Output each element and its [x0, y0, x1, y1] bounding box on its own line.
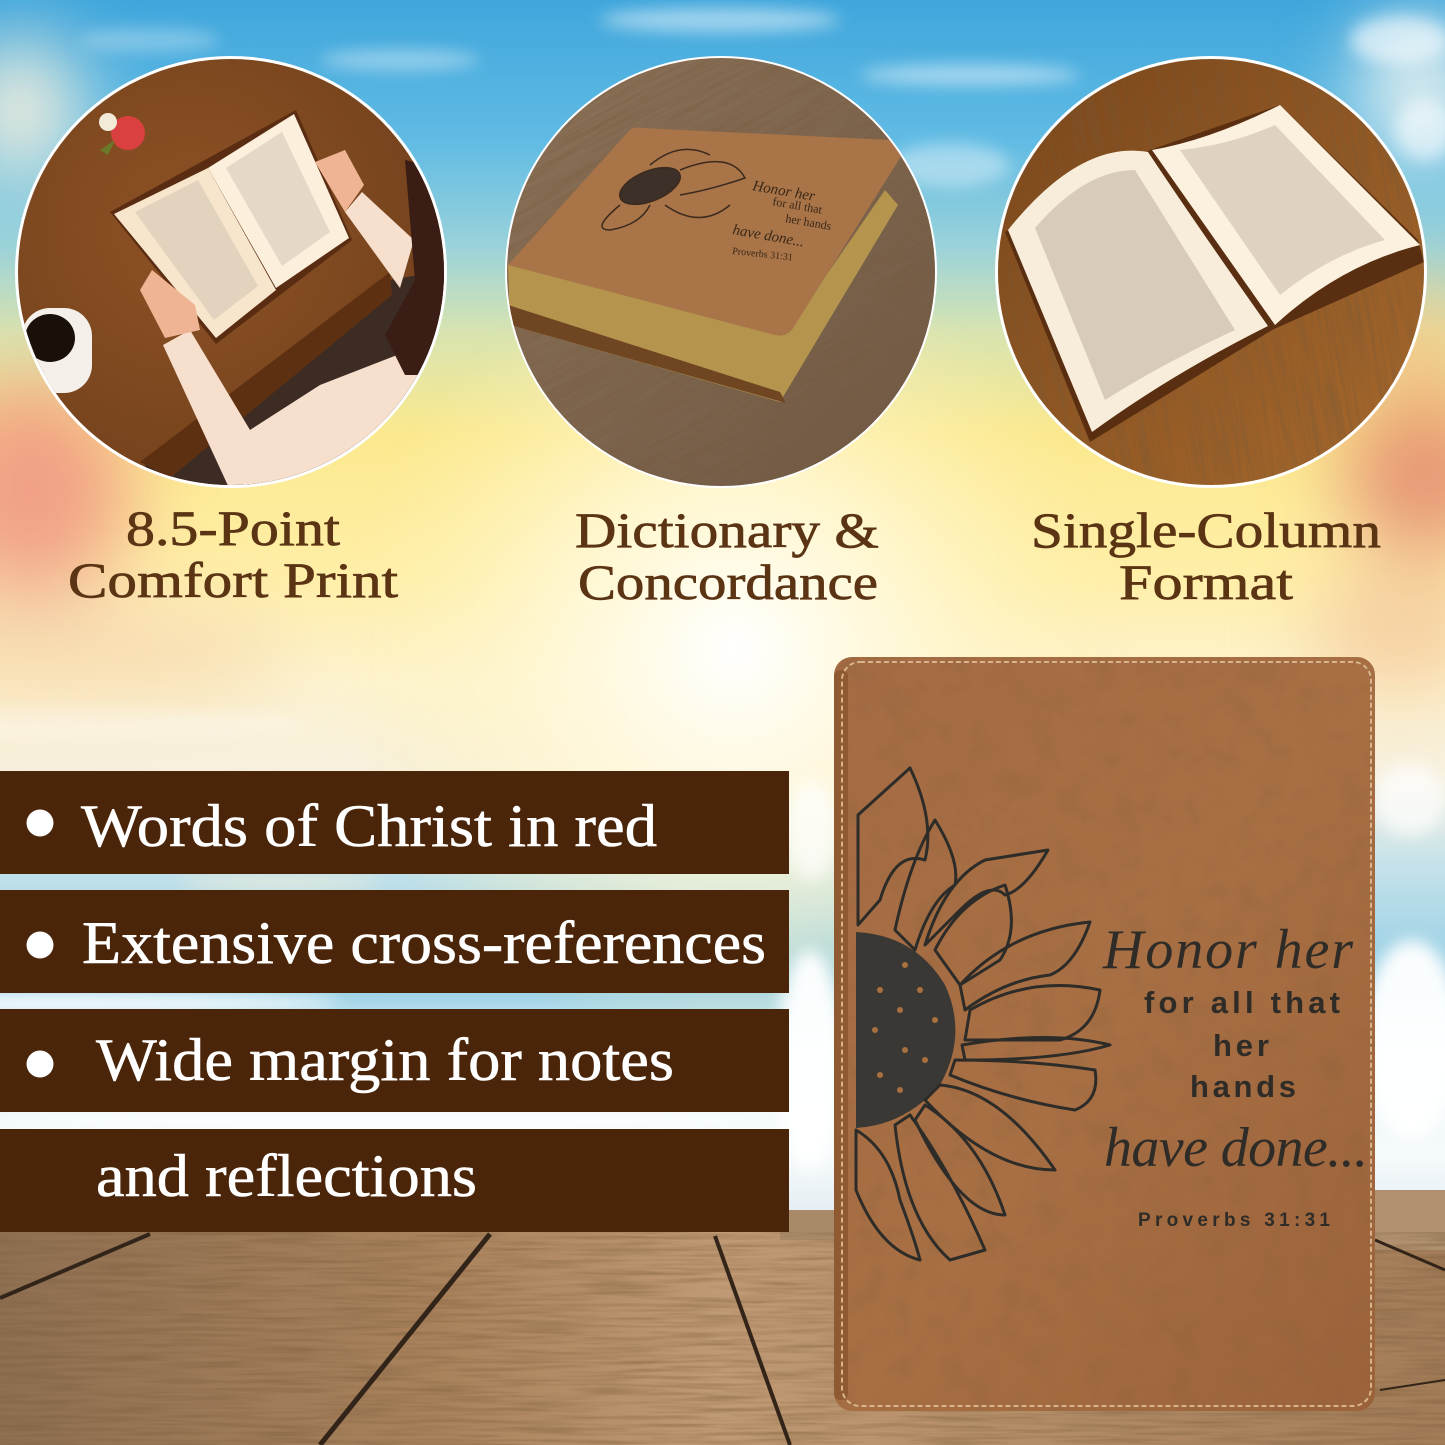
photo circle: open Bible on wood	[995, 56, 1427, 488]
left page	[1008, 151, 1268, 432]
caption: Dictionary & Concordance: Concordance	[578, 554, 878, 610]
feature bar: and reflections	[0, 1129, 789, 1232]
open book	[110, 110, 352, 344]
engraved text: for all that	[1144, 985, 1340, 1020]
feature bar: Wide margin for notes	[0, 1009, 789, 1112]
caption: 8.5-Point Comfort Print: Comfort Print	[68, 552, 398, 608]
photo circle: closed sunflower Bible: for all that	[771, 194, 824, 217]
engraved text: Honor her	[1102, 919, 1353, 981]
book page block	[508, 190, 898, 402]
engraved text: her	[1213, 1028, 1269, 1063]
engraved sunflower	[602, 149, 745, 230]
engraved text: Proverbs 31:31	[1138, 1210, 1330, 1231]
hair	[385, 160, 447, 375]
photo circle: closed sunflower Bible: her hands	[784, 211, 833, 233]
coffee mug	[22, 308, 92, 393]
photo circle: woman reading at table	[15, 55, 447, 490]
engraved text: have done...	[1104, 1117, 1368, 1179]
caption: Single-Column Format: Single-Column	[1031, 502, 1381, 558]
caption: 8.5-Point Comfort Print	[68, 500, 398, 608]
large product: leather Bible cover	[834, 657, 1375, 1411]
book cover	[1005, 105, 1424, 442]
sweater: reader	[163, 332, 425, 485]
wooden table	[0, 1190, 1445, 1445]
feature bar: Words of Christ in red	[0, 771, 789, 874]
caption: Single-Column Format: Format	[1119, 554, 1293, 610]
caption: Dictionary & Concordance	[575, 502, 879, 610]
engraved text: hands	[1190, 1069, 1296, 1104]
left hand	[140, 270, 200, 338]
right page	[1152, 105, 1420, 325]
engraved text	[1102, 919, 1368, 1231]
rose	[99, 113, 145, 155]
feature bar: Extensive cross-references	[0, 890, 789, 993]
photo circle: closed sunflower Bible	[505, 56, 937, 488]
caption: Dictionary & Concordance: Dictionary &	[575, 502, 879, 558]
photo circle: closed sunflower Bible: Proverbs 31:31	[732, 246, 793, 263]
caption: Single-Column Format	[1031, 502, 1381, 610]
photo circle: closed sunflower Bible: have done...	[731, 222, 805, 251]
feature bar: Extensive cross-references: Extensive cross-references	[82, 910, 766, 976]
sunflower engraving	[856, 768, 1110, 1260]
feature bar: and reflections: and reflections	[96, 1143, 477, 1209]
sweater sleeve	[345, 192, 414, 288]
cover text: Honor her	[750, 178, 816, 205]
feature bar: Words of Christ in red: Words of Christ in red	[81, 793, 657, 859]
caption: 8.5-Point Comfort Print: 8.5-Point	[126, 500, 340, 556]
book cover	[508, 128, 901, 336]
right hand	[315, 150, 364, 212]
feature bar: Wide margin for notes: Wide margin for notes	[96, 1027, 674, 1093]
